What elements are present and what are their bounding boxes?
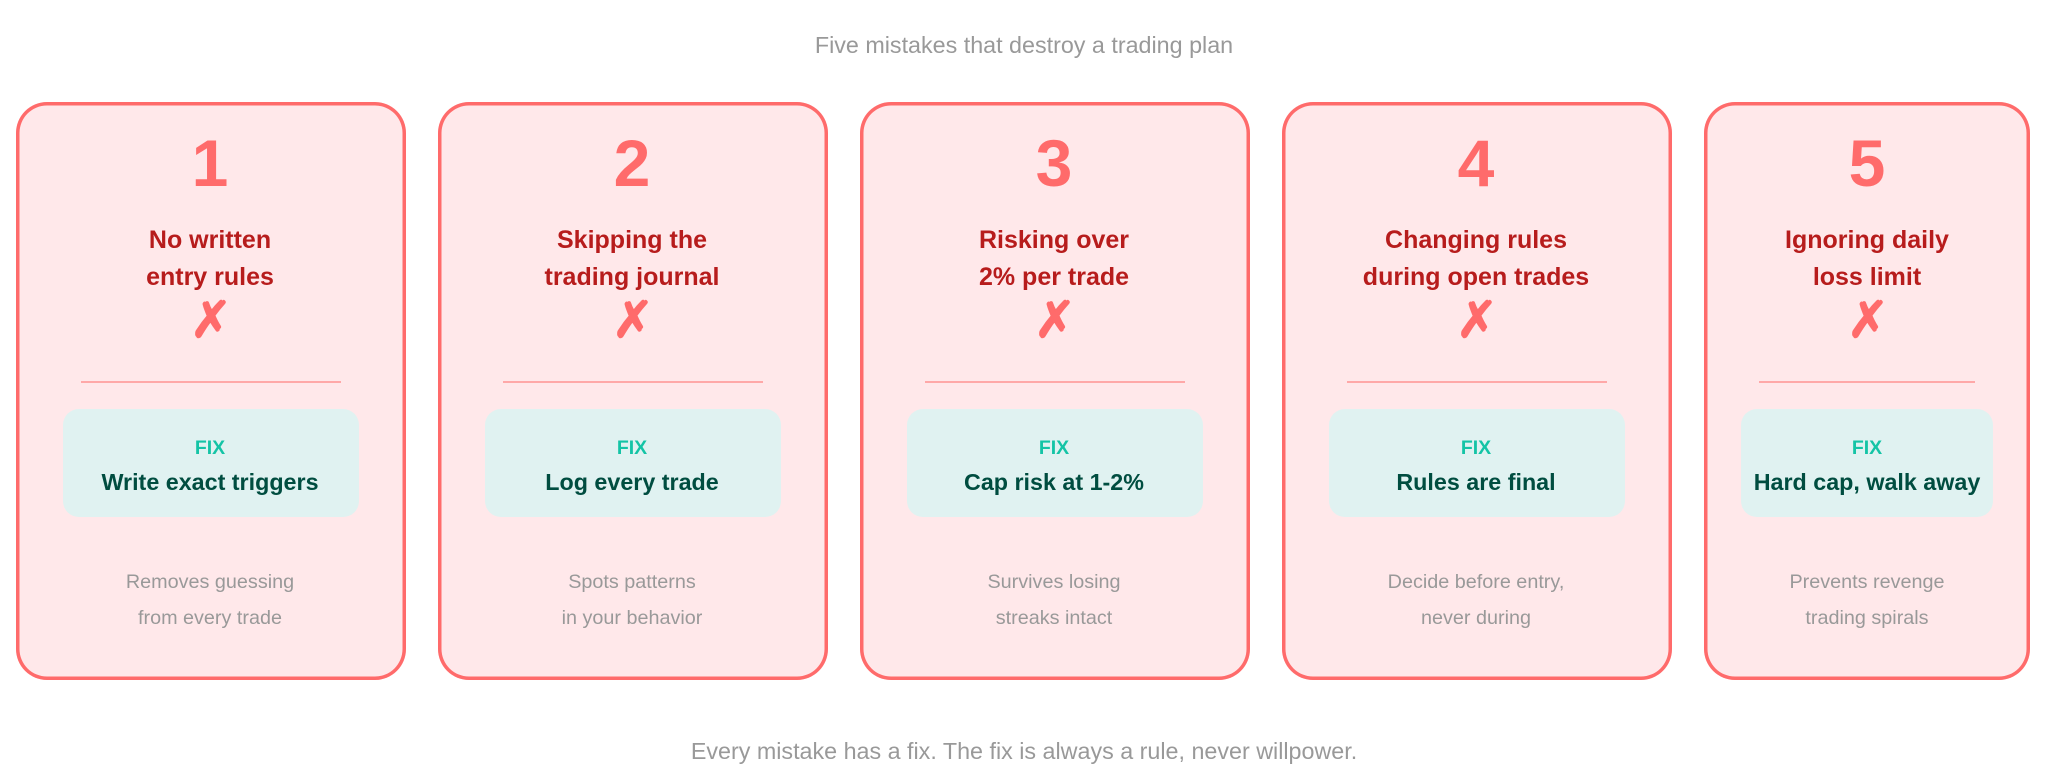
number 2: 2 <box>614 126 650 200</box>
benefit text <box>987 571 1121 629</box>
number 4: 4 <box>1458 126 1494 200</box>
icon: cross: ✗ <box>1034 291 1076 349</box>
fix action: Hard cap, walk away <box>1754 469 1980 495</box>
fix box <box>1741 409 1993 517</box>
footer note: Every mistake has a fix. The fix is always a rule, never willpower. <box>691 738 1357 764</box>
mistake title: No written <box>149 226 271 254</box>
benefit text: streaks intact <box>996 607 1112 629</box>
icon: cross: ✗ <box>612 291 654 349</box>
panel: mistake 4 <box>1282 102 1672 680</box>
mistake title: during open trades <box>1363 262 1589 290</box>
fix action: Rules are final <box>1396 469 1556 495</box>
heading: Five mistakes that destroy a trading plan <box>815 32 1233 58</box>
mistake title <box>979 226 1129 290</box>
benefit text: Survives losing <box>987 571 1121 593</box>
benefit text <box>1388 571 1564 629</box>
mistake title: Ignoring daily <box>1785 226 1949 254</box>
benefit text: from every trade <box>138 607 282 629</box>
icon: cross: ✗ <box>190 291 232 349</box>
panel: mistake 2 <box>438 102 828 680</box>
fix label: FIX <box>1039 437 1069 459</box>
mistake title: Risking over <box>979 226 1129 254</box>
mistake title: entry rules <box>146 262 274 290</box>
mistake title: Skipping the <box>557 226 707 254</box>
panel: mistake 3 <box>860 102 1250 680</box>
benefit text: Spots patterns <box>568 571 696 593</box>
mistake title <box>1785 226 1949 290</box>
benefit text: trading spirals <box>1805 607 1929 629</box>
benefit text <box>126 571 294 629</box>
number 5: 5 <box>1849 126 1885 200</box>
benefit text <box>1789 571 1945 629</box>
fix label: FIX <box>1461 437 1491 459</box>
number 3: 3 <box>1036 126 1072 200</box>
fix action: Write exact triggers <box>101 469 319 495</box>
fix action: Log every trade <box>545 469 719 495</box>
mistake title: 2% per trade <box>979 262 1129 290</box>
fix action: Cap risk at 1-2% <box>964 469 1144 495</box>
fix label: FIX <box>617 437 647 459</box>
icon: cross: ✗ <box>1847 291 1889 349</box>
benefit text <box>562 571 702 629</box>
panel: mistake 5 <box>1704 102 2030 680</box>
benefit text: in your behavior <box>562 607 702 629</box>
mistake title: trading journal <box>544 262 720 290</box>
mistake title: Changing rules <box>1385 226 1567 254</box>
fix box <box>907 409 1203 517</box>
benefit text: Decide before entry, <box>1388 571 1564 593</box>
fix label: FIX <box>1852 437 1882 459</box>
number 1: 1 <box>192 126 228 200</box>
benefit text: Prevents revenge <box>1789 571 1945 593</box>
benefit text: Removes guessing <box>126 571 294 593</box>
benefit text: never during <box>1421 607 1531 629</box>
fix box <box>63 409 359 517</box>
icon: cross: ✗ <box>1456 291 1498 349</box>
fix box <box>485 409 781 517</box>
fix box <box>1329 409 1625 517</box>
panel: mistake 1 <box>16 102 406 680</box>
mistake title <box>1363 226 1589 290</box>
mistake title <box>146 226 274 290</box>
mistake title: loss limit <box>1813 262 1921 290</box>
mistake title <box>544 226 720 290</box>
fix label: FIX <box>195 437 225 459</box>
